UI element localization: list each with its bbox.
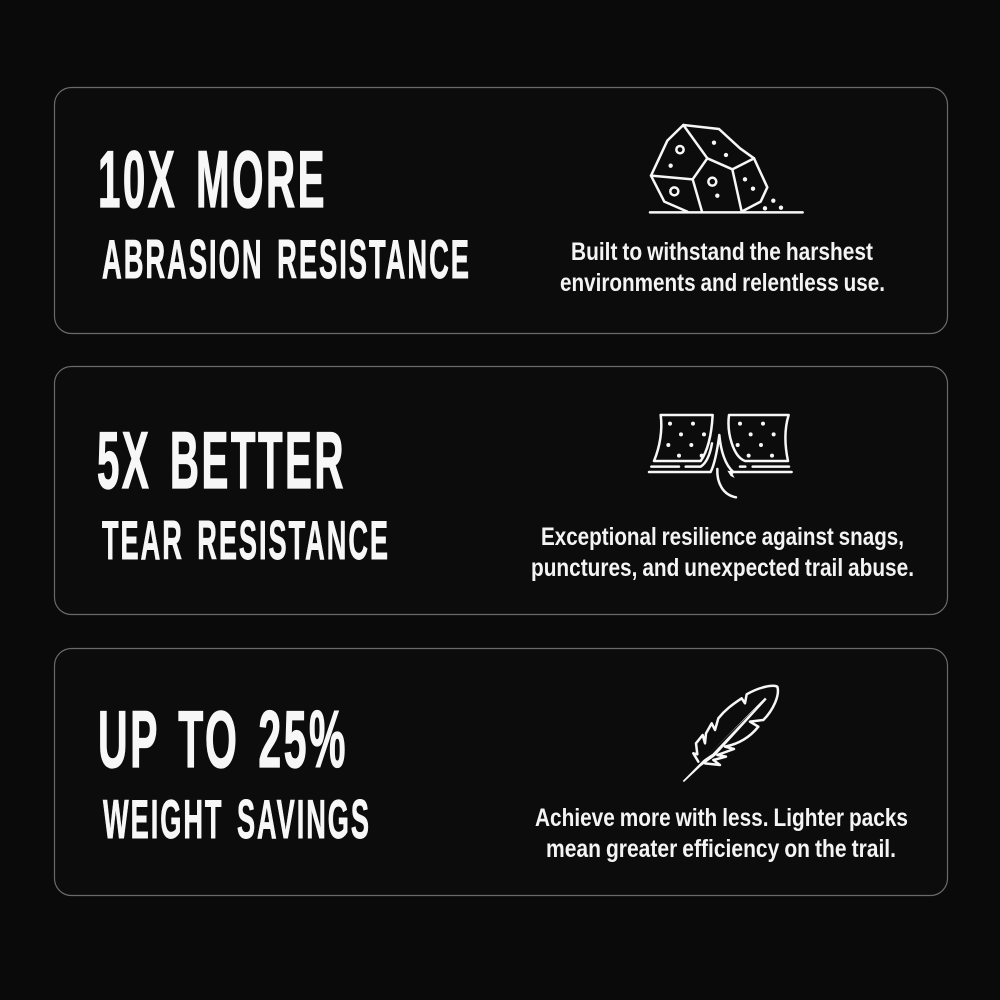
description: tear: Exceptional resilience against snags, xyxy=(541,523,904,551)
description: weight xyxy=(535,804,908,863)
description: abrasion xyxy=(560,238,885,297)
icon: torn fabric xyxy=(649,415,792,497)
description: weight: mean greater efficiency on the trail. xyxy=(546,835,896,863)
icon: feather xyxy=(683,686,778,782)
description: weight: Achieve more with less. Lighter packs xyxy=(535,804,908,832)
panel: abrasion resistance: 10X MORE xyxy=(98,135,327,225)
heading: up to 25%: UP TO 25% xyxy=(98,695,348,785)
panel: abrasion resistance xyxy=(54,88,948,334)
panel: abrasion resistance: ABRASION RESISTANCE xyxy=(102,228,471,290)
panel: tear resistance xyxy=(54,366,948,614)
description: tear xyxy=(531,523,914,582)
icon: cracked rock xyxy=(650,125,803,212)
panel: tear resistance: 5X BETTER xyxy=(97,416,346,506)
description: abrasion: Built to withstand the harshest xyxy=(571,238,874,266)
description: abrasion: environments and relentless use. xyxy=(560,269,885,297)
panel: weight savings xyxy=(54,648,948,896)
panel: weight savings: WEIGHT SAVINGS xyxy=(103,788,371,850)
description: tear: punctures, and unexpected trail abuse. xyxy=(531,554,914,582)
panel: tear resistance: TEAR RESISTANCE xyxy=(102,509,390,571)
